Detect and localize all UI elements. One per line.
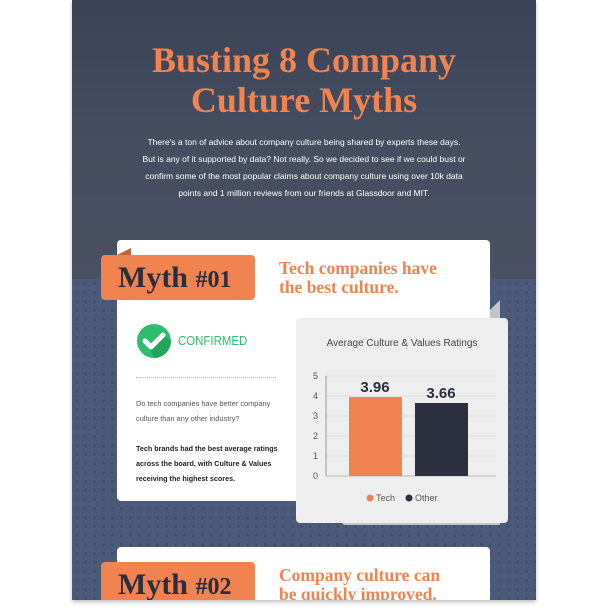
title [152,40,456,120]
title: Busting 8 Company [152,40,456,80]
confirmed label: CONFIRMED [178,333,247,348]
bar chart: 2 [313,431,318,441]
shadow shape card1 [342,300,500,525]
bar chart: 5 [313,371,318,381]
myth 1 tag [101,248,255,300]
confirmed badge [137,324,247,358]
bar chart: Other [415,493,438,503]
bar chart panel [296,318,508,523]
bar chart: 4 [313,391,318,401]
myth 1 heading: Tech companies have the best culture. [279,258,437,297]
bar chart [313,371,496,503]
answer text: Tech brands had the best average ratings across the board, with Culture & Values receiving the highest scores. [136,444,278,483]
bar chart: 3 [313,411,318,421]
header photo background [72,0,536,279]
title: Culture Myths [191,80,417,120]
bar chart: Tech [376,493,395,503]
bar chart: 3.66 [426,385,456,402]
myth 1 tag: Myth #01 [118,261,232,294]
icon: check [137,324,171,358]
question text: Do tech companies have better company culture than any other industry? [136,399,270,423]
bar chart: 3.96 [360,379,390,396]
bar chart: 0 [313,471,318,481]
panel: myth 1 card [117,240,490,501]
page column [72,0,536,600]
intro text: There's a ton of advice about company culture being shared by experts these days. But is any of it supported by data? Not really. So we decided to see if we could bust or confirm some of the most popular claims about company culture using over 10k data points and 1 million reviews from our friends at Glassdoor and MIT. [142,137,466,198]
chart title: Average Culture & Values Ratings [327,338,477,349]
bar chart: 1 [313,451,318,461]
panel: myth 2 card [117,547,490,600]
